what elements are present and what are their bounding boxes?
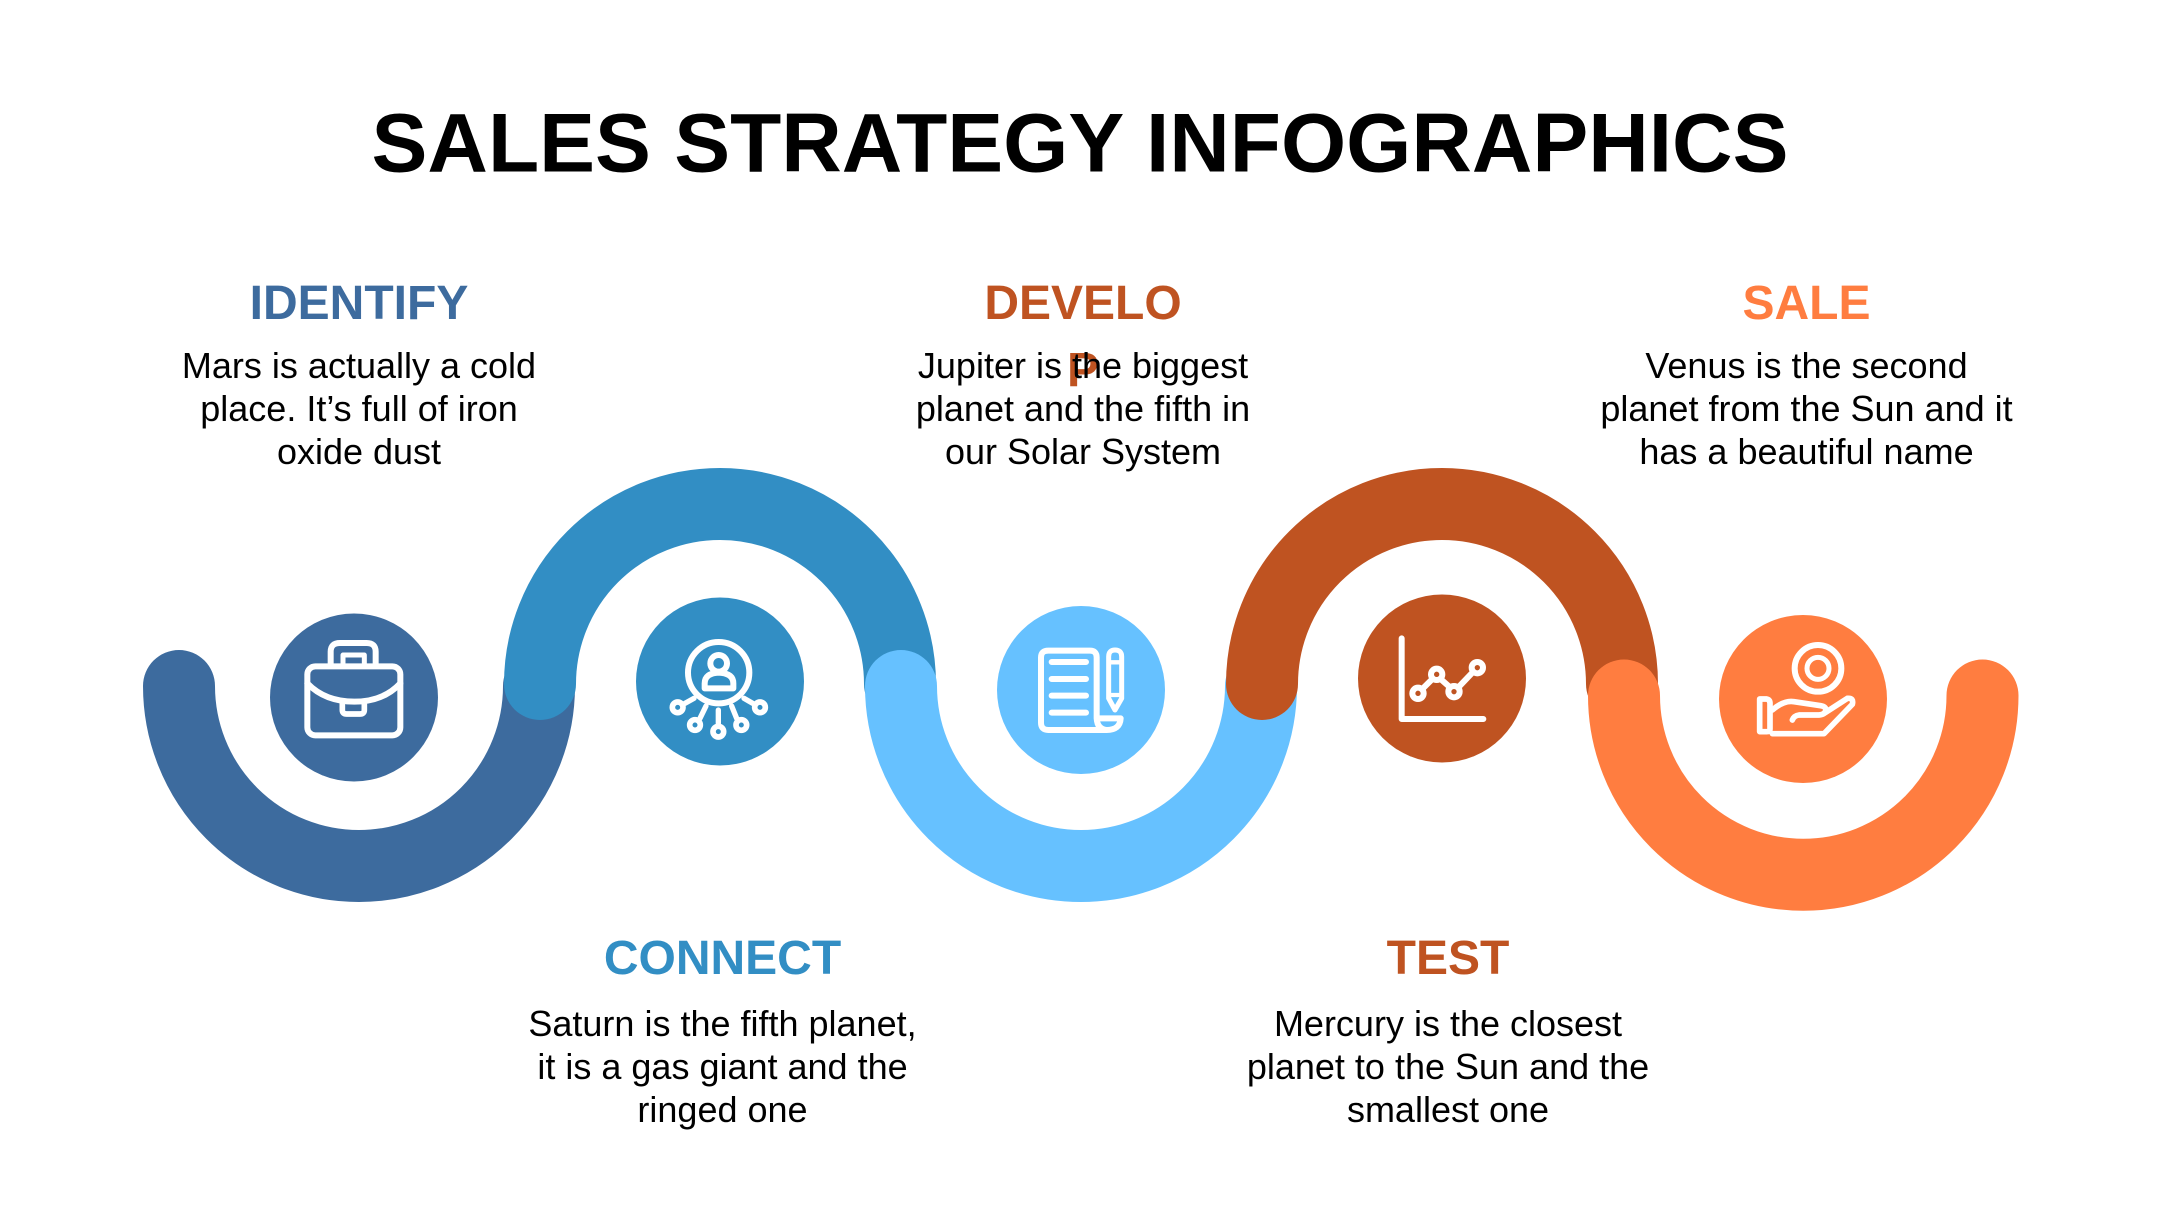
text block: sale xyxy=(1600,277,2013,472)
icon: document and pencil xyxy=(997,606,1165,774)
description: identify: place. It’s full of iron xyxy=(200,388,518,429)
heading: develop, wrapped: DEVELO xyxy=(984,277,1182,330)
description: connect: it is a gas giant and the xyxy=(537,1046,908,1087)
description: sale: Venus is the second xyxy=(1645,345,1968,386)
heading: sale: SALE xyxy=(1742,277,1871,330)
text block: connect xyxy=(528,932,917,1130)
description: identify: Mars is actually a cold xyxy=(182,345,536,386)
text block: identify xyxy=(182,277,536,472)
description: develop: Jupiter is the biggest xyxy=(918,345,1248,386)
description: identify: oxide dust xyxy=(277,431,441,472)
title: SALES STRATEGY INFOGRAPHICS xyxy=(372,96,1788,190)
description: develop: planet and the fifth in xyxy=(916,388,1250,429)
description: sale: has a beautiful name xyxy=(1639,431,1974,472)
description: test: planet to the Sun and the xyxy=(1247,1046,1649,1087)
description: connect: Saturn is the fifth planet, xyxy=(528,1003,917,1044)
description: test: Mercury is the closest xyxy=(1274,1003,1622,1044)
description: connect: ringed one xyxy=(637,1089,808,1130)
heading: develop, wrapped: P xyxy=(1067,344,1099,397)
arc 2: connect xyxy=(540,504,900,684)
text block: test xyxy=(1247,932,1649,1130)
icon: network person xyxy=(636,598,804,766)
arc 4: test xyxy=(1262,504,1622,684)
icon: hand holding coin xyxy=(1719,615,1887,783)
heading: test: TEST xyxy=(1387,932,1509,985)
arc 5: sale xyxy=(1624,696,1982,875)
description: develop: our Solar System xyxy=(945,431,1221,472)
text block: develop xyxy=(916,277,1250,472)
icon: briefcase xyxy=(270,614,438,782)
arc 3: develop xyxy=(901,686,1261,866)
heading: connect: CONNECT xyxy=(604,932,841,985)
heading: identify: IDENTIFY xyxy=(250,277,468,330)
description: test: smallest one xyxy=(1347,1089,1549,1130)
arc 1: identify xyxy=(179,686,539,866)
description: sale: planet from the Sun and it xyxy=(1600,388,2013,429)
icon: line chart xyxy=(1358,594,1526,762)
wave chart: five connected arcs xyxy=(179,504,1982,875)
